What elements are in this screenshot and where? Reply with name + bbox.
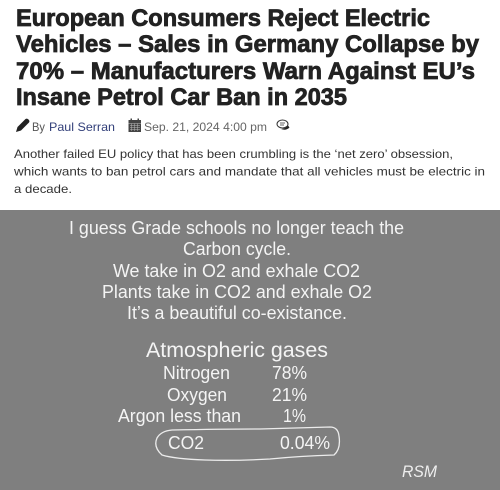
summary text xyxy=(13,147,485,196)
table: gas percentages: 1% xyxy=(283,406,306,426)
table: gas percentages: 78% xyxy=(272,363,307,383)
byline: By xyxy=(32,120,45,134)
signature: RSM xyxy=(402,462,438,481)
hand-drawn circle around CO2 xyxy=(156,427,339,460)
text block: carbon cycle message: We take in O2 and exhale CO2 xyxy=(113,261,360,281)
text block: carbon cycle message xyxy=(69,218,404,323)
text block: carbon cycle message: Carbon cycle. xyxy=(183,239,291,259)
summary text: a decade. xyxy=(14,182,72,196)
icon: calendar xyxy=(128,118,141,132)
table: gas percentages: 21% xyxy=(272,385,307,405)
title xyxy=(16,5,479,111)
table: gas percentages: Nitrogen xyxy=(163,363,230,383)
heading: atmospheric gases: Atmospheric gases xyxy=(146,339,328,362)
table: gas percentages: Argon less than xyxy=(118,406,241,426)
table: gas percentages xyxy=(118,363,330,453)
text block: carbon cycle message: I guess Grade schools no longer teach the xyxy=(69,218,404,238)
byline: Paul Serran xyxy=(49,120,115,134)
title: Insane Petrol Car Ban in 2035 xyxy=(16,84,347,111)
title: European Consumers Reject Electric xyxy=(16,5,430,32)
text block: carbon cycle message: It’s a beautiful co-existance. xyxy=(127,303,347,323)
title: Vehicles – Sales in Germany Collapse by xyxy=(16,31,479,58)
icon: comments xyxy=(277,120,290,130)
icon: pencil xyxy=(16,119,29,132)
summary text: which wants to ban petrol cars and mandate that all vehicles must be electric in xyxy=(13,164,485,178)
panel: article header xyxy=(0,0,500,210)
title: 70% – Manufacturers Warn Against EU’s xyxy=(16,58,475,85)
table: gas percentages: Oxygen xyxy=(167,385,227,405)
table: gas percentages: CO2 xyxy=(168,433,204,453)
table: gas percentages: 0.04% xyxy=(280,433,330,453)
panel: grey message xyxy=(0,210,500,490)
date: Sep. 21, 2024 4:00 pm xyxy=(144,120,267,134)
summary text: Another failed EU policy that has been crumbling is the ‘net zero’ obsession, xyxy=(14,147,453,161)
text block: carbon cycle message: Plants take in CO2 and exhale O2 xyxy=(102,282,372,302)
